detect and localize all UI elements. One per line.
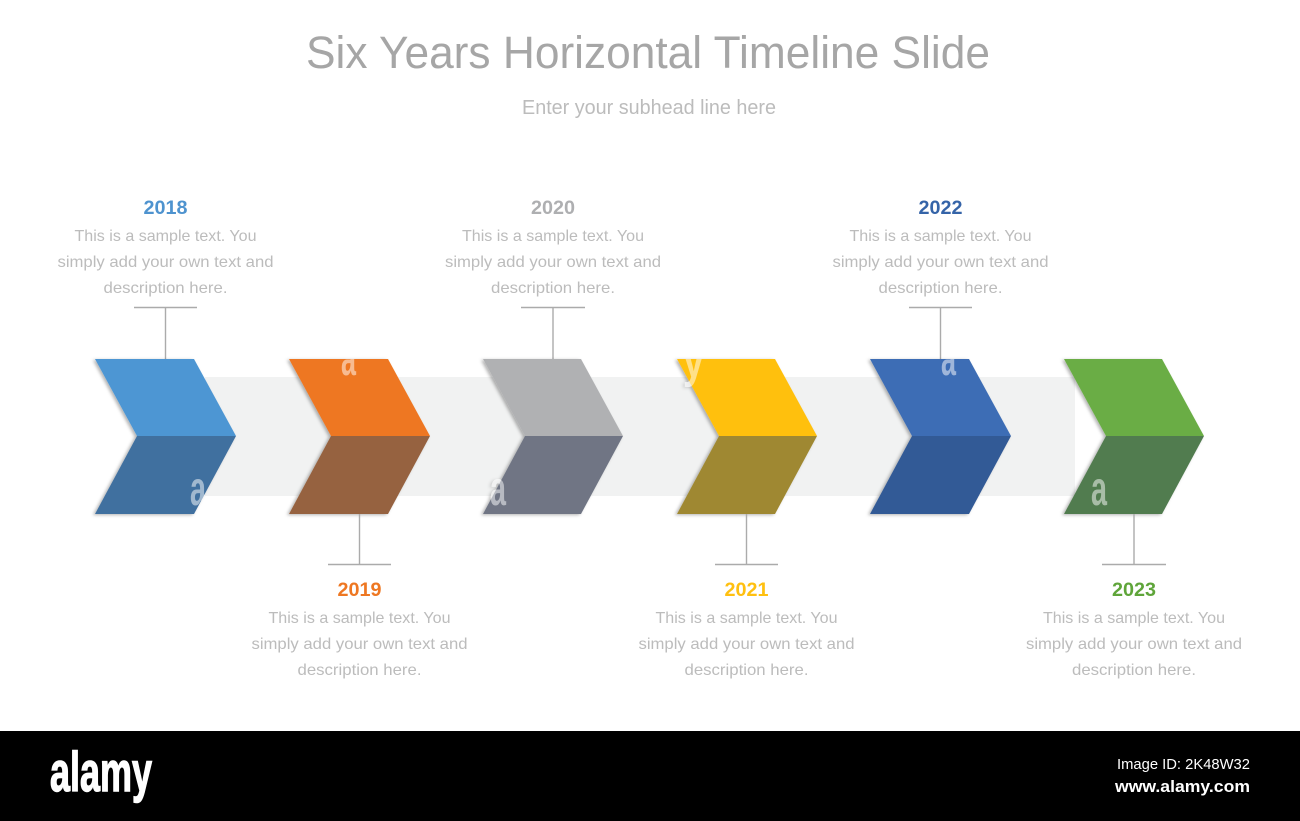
description 2023: description here. <box>1072 662 1196 679</box>
chevron 2020: a <box>490 463 506 516</box>
chevron 2023: a <box>1091 463 1107 516</box>
chevron 2021: y <box>683 335 704 388</box>
year 2019: 2019 <box>338 580 382 601</box>
connector 2022 <box>909 308 972 359</box>
description 2018: description here. <box>104 280 228 297</box>
year 2021: 2021 <box>724 580 769 601</box>
milestone 2022 <box>832 198 1048 514</box>
connector 2023 <box>1102 514 1166 564</box>
description 2018: This is a sample text. You <box>74 228 256 245</box>
chevron 2023 <box>1064 359 1204 516</box>
description 2022 <box>832 228 1048 297</box>
description 2021: simply add your own text and <box>638 636 854 653</box>
description 2022: This is a sample text. You <box>850 228 1032 245</box>
connector 2021 <box>715 514 778 564</box>
description 2020: This is a sample text. You <box>462 228 644 245</box>
milestone 2023 <box>1026 359 1242 679</box>
year 2022: 2022 <box>918 198 962 219</box>
description 2022: simply add your own text and <box>832 254 1048 271</box>
description 2019: This is a sample text. You <box>268 610 450 627</box>
description 2023: This is a sample text. You <box>1043 610 1225 627</box>
chevron 2019: a <box>341 333 356 386</box>
footer bar <box>0 731 1300 821</box>
connector 2020 <box>521 308 585 359</box>
chevron 2019 <box>286 358 430 517</box>
footer logo: alamy <box>50 740 152 803</box>
description 2020: simply add your own text and <box>445 254 661 271</box>
milestone 2021 <box>638 335 854 679</box>
description 2020 <box>445 228 661 297</box>
description 2022: description here. <box>878 280 1002 297</box>
chevron 2020 <box>483 359 623 516</box>
description 2019: simply add your own text and <box>252 636 468 653</box>
description 2018 <box>58 228 274 297</box>
chevron 2018: a <box>190 463 206 516</box>
image id: Image ID: 2K48W32 <box>1117 756 1250 773</box>
description 2021: This is a sample text. You <box>656 610 838 627</box>
milestone 2020 <box>445 198 661 516</box>
connector 2018 <box>134 308 197 359</box>
description 2023: simply add your own text and <box>1026 636 1242 653</box>
title: Six Years Horizontal Timeline Slide <box>306 27 990 78</box>
milestone 2019 <box>252 333 468 679</box>
description 2019: description here. <box>298 662 422 679</box>
chevron 2022 <box>867 358 1011 517</box>
website: www.alamy.com <box>1114 777 1250 796</box>
description 2023 <box>1026 610 1242 679</box>
chevron 2021 <box>677 335 817 514</box>
description 2020: description here. <box>491 280 615 297</box>
chevron 2022: a <box>941 333 956 386</box>
chevron 2018 <box>95 359 236 516</box>
connector 2019 <box>328 514 391 564</box>
year 2020: 2020 <box>531 198 575 219</box>
description 2021: description here. <box>684 662 808 679</box>
description 2021 <box>638 610 854 679</box>
year 2018: 2018 <box>144 198 188 219</box>
description 2019 <box>252 610 468 679</box>
description 2018: simply add your own text and <box>58 254 274 271</box>
year 2023: 2023 <box>1112 580 1156 601</box>
milestone 2018 <box>58 198 274 516</box>
timeline band <box>205 377 1075 496</box>
subhead: Enter your subhead line here <box>522 97 776 119</box>
